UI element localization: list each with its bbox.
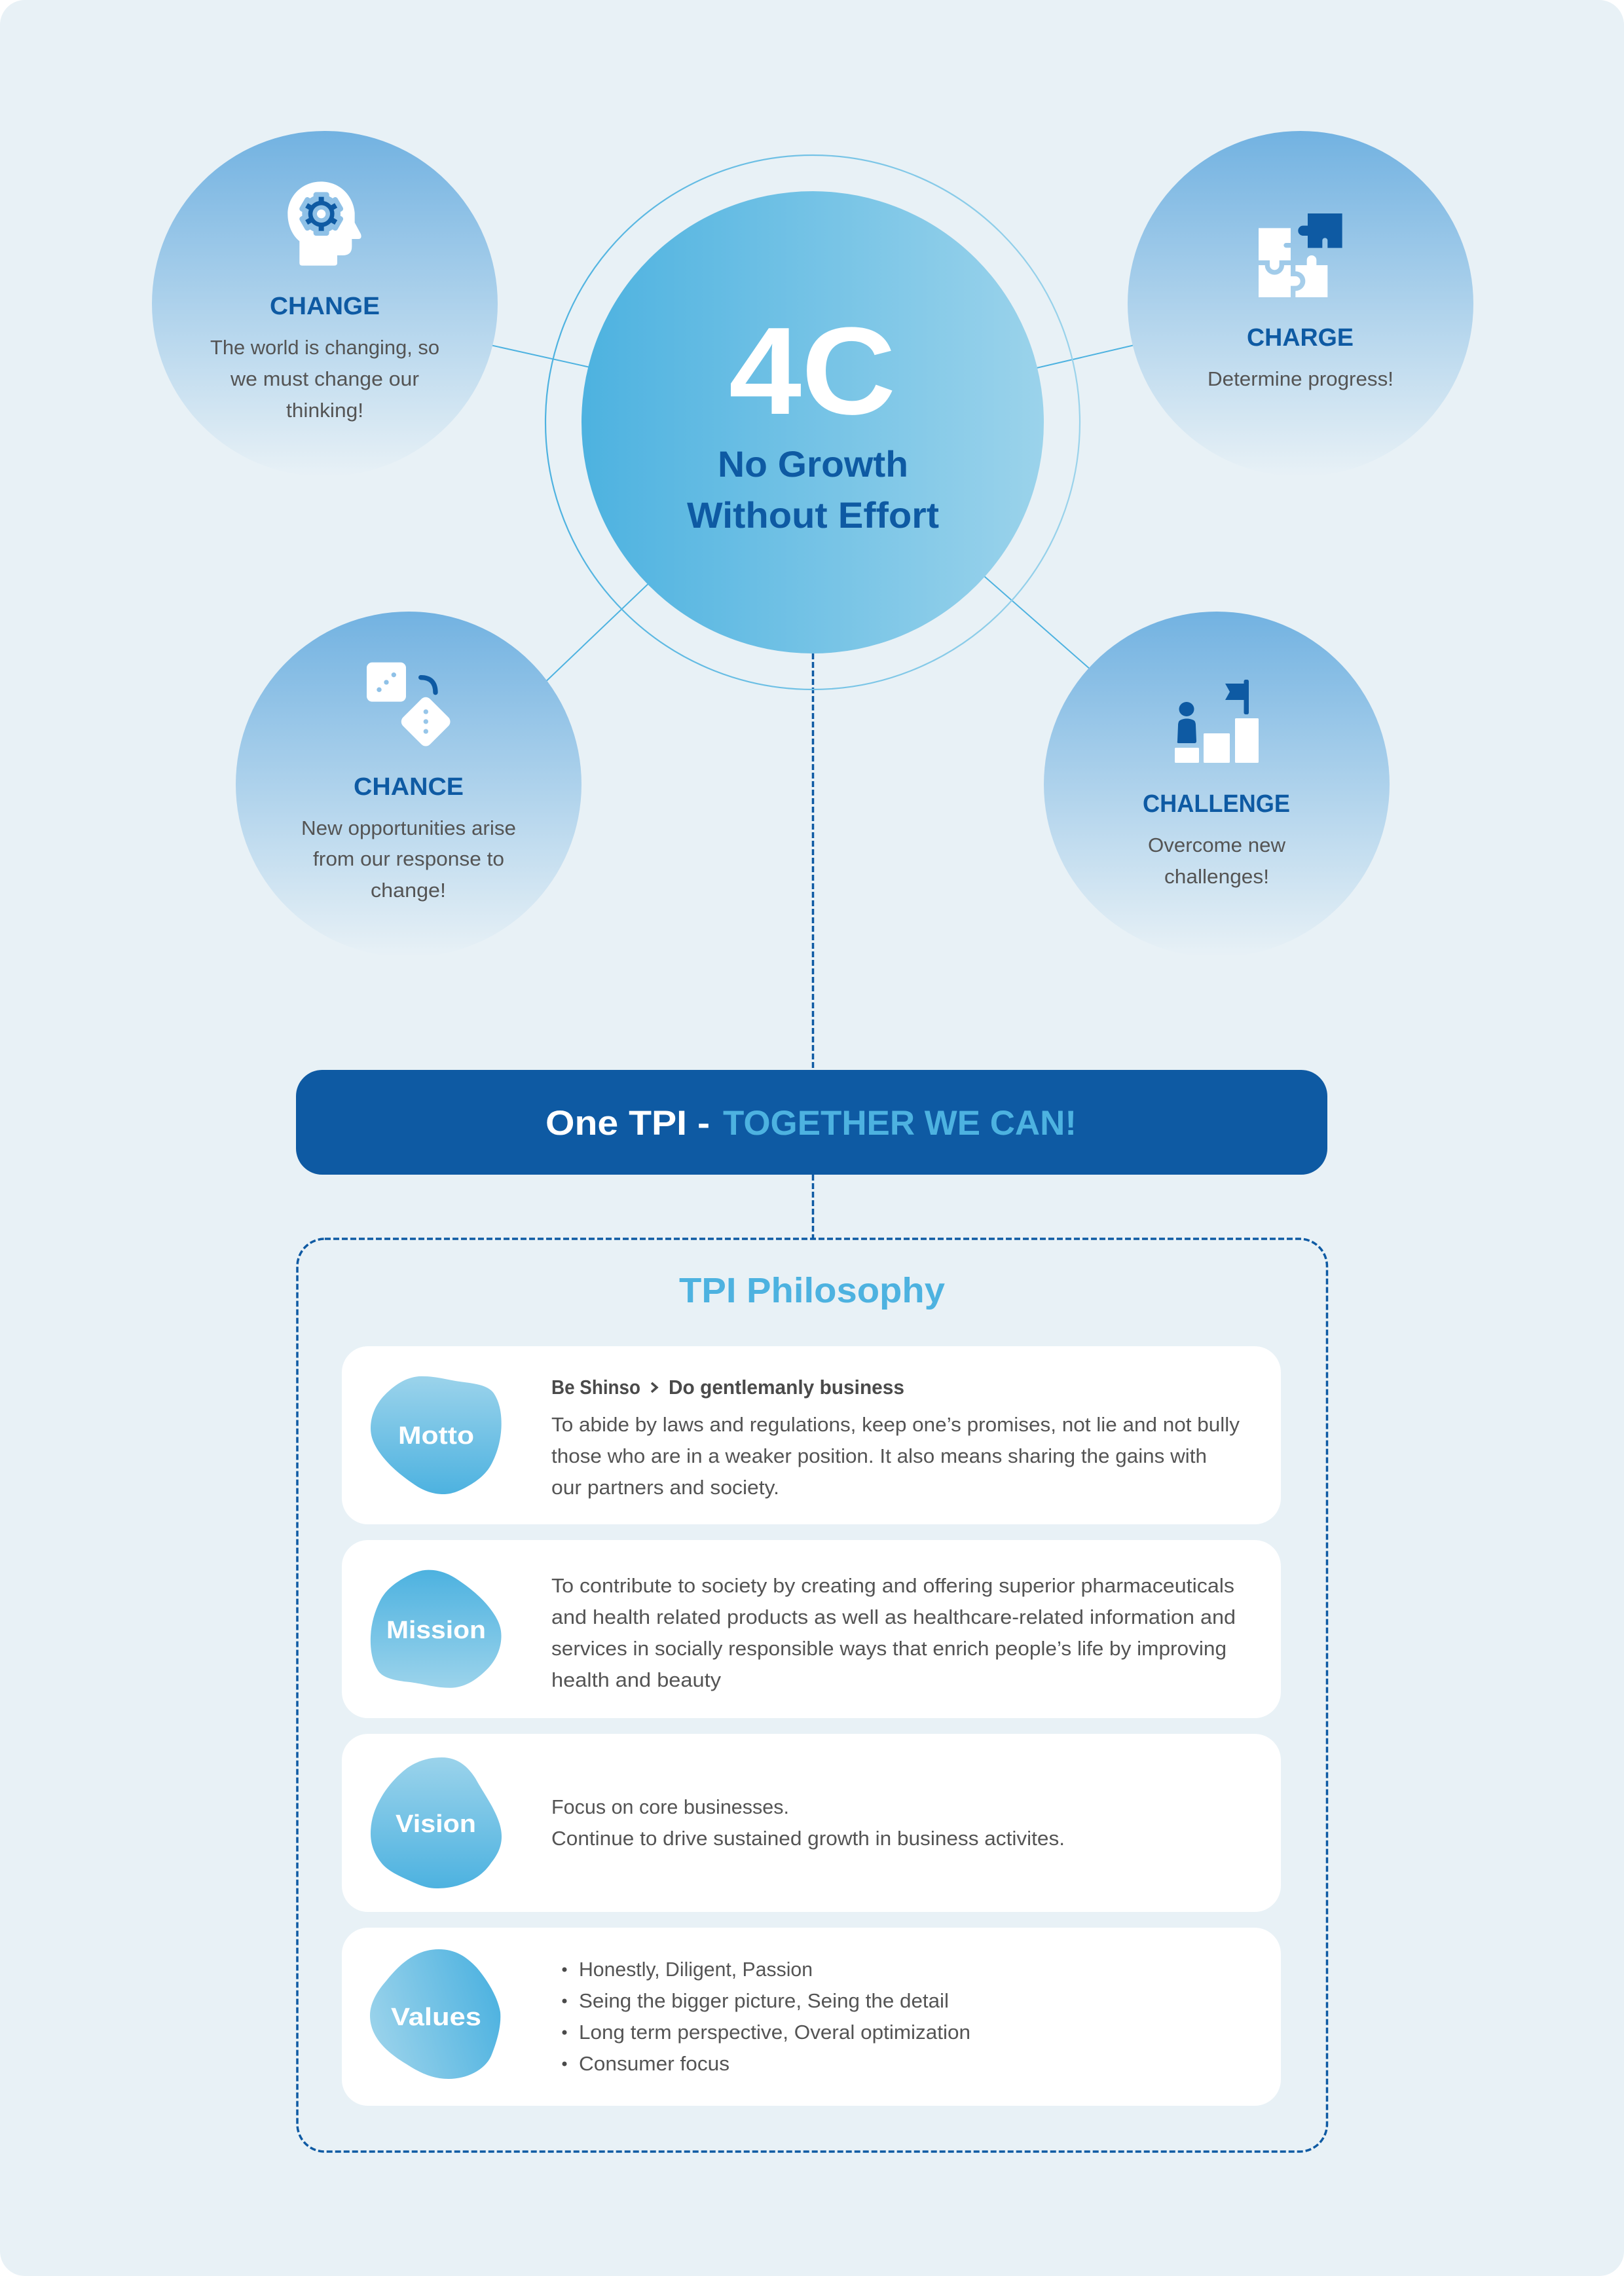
motto text: our partners and society. [551,1476,779,1499]
description [301,817,516,902]
vision text [551,1795,1065,1850]
heading: 4C: 4C [729,302,896,441]
description [1148,834,1286,888]
mission text: services in socially responsible ways that enrich people’s life by improving [551,1637,1227,1660]
panel: CHALLENGE [1044,612,1390,957]
connector: chance to center [540,578,655,687]
values list: Long term perspective, Overal optimization [579,2021,970,2044]
panel: CHARGE [1128,131,1473,477]
connector: charge to center [1028,343,1143,370]
motto heading: Be Shinso [551,1376,640,1399]
card: Values [342,1928,1281,2106]
values list: Honestly, Diligent, Passion [579,1958,813,1981]
description: thinking! [286,399,363,422]
subheading line 1: No Growth [718,443,908,485]
blob: Motto: Motto [398,1422,474,1450]
values list: Consumer focus [579,2052,729,2075]
title: CHALLENGE [1143,790,1290,818]
banner text white: One TPI - [545,1104,710,1143]
icon: head with gear [287,181,361,266]
subheading line 2: Without Effort [687,494,939,536]
dashed connector: center to banner [812,653,814,1070]
blob: Vision [371,1757,502,1888]
title: CHANCE [354,773,464,801]
description: Determine progress! [1208,367,1393,390]
description: The world is changing, so [210,336,439,359]
mission text [551,1574,1236,1691]
blob: Values [370,1949,500,2079]
description: challenges! [1164,865,1269,888]
mission text: and health related products as well as healthcare-related information and [551,1606,1236,1628]
description: change! [371,879,446,902]
connector: change to center [485,344,596,369]
blob: Values: Values [391,2004,481,2031]
dashed connector: banner to philosophy box [812,1175,814,1239]
connector: challenge to center [979,572,1097,675]
panel: TPI Philosophy [297,1239,1327,2152]
blob: Motto [371,1376,502,1494]
description: Overcome new [1148,834,1286,856]
blob: Mission [371,1570,502,1688]
description: from our response to [313,847,504,870]
panel: CHANCE [236,612,581,957]
motto text: those who are in a weaker position. It also means sharing the gains with [551,1444,1207,1467]
values list [562,1958,970,2075]
icon: dice [367,663,452,748]
card: Vision [342,1734,1281,1912]
description: New opportunities arise [301,817,516,839]
description [210,336,439,422]
outer ring [545,155,1080,689]
banner text blue: TOGETHER WE CAN! [723,1104,1077,1143]
motto text: To abide by laws and regulations, keep one’s promises, not lie and not bully [551,1413,1240,1436]
values list: Seing the bigger picture, Seing the detail [579,1989,949,2012]
panel: CHANGE [152,131,498,477]
vision text: Focus on core businesses. [551,1795,789,1818]
card: Mission [342,1540,1281,1718]
inner disc [581,191,1044,653]
motto heading: Do gentlemanly business [669,1376,904,1399]
card: Motto [342,1346,1281,1524]
motto heading [551,1376,904,1399]
banner: One TPI [296,1070,1327,1175]
blob: Mission: Mission [386,1617,486,1644]
title: CHANGE [270,293,380,320]
mission text: health and beauty [551,1668,722,1691]
description: we must change our [230,367,419,390]
vision text: Continue to drive sustained growth in business activites. [551,1827,1065,1850]
icon: puzzle pieces [1259,213,1342,297]
icon: steps with flag and person [1175,680,1259,763]
blob: Vision: Vision [396,1810,476,1838]
heading: TPI Philosophy [679,1271,945,1310]
title: CHARGE [1247,324,1354,352]
center circle: 4C [545,155,1080,689]
mission text: To contribute to society by creating and offering superior pharmaceuticals [551,1574,1234,1597]
motto text [551,1413,1240,1499]
